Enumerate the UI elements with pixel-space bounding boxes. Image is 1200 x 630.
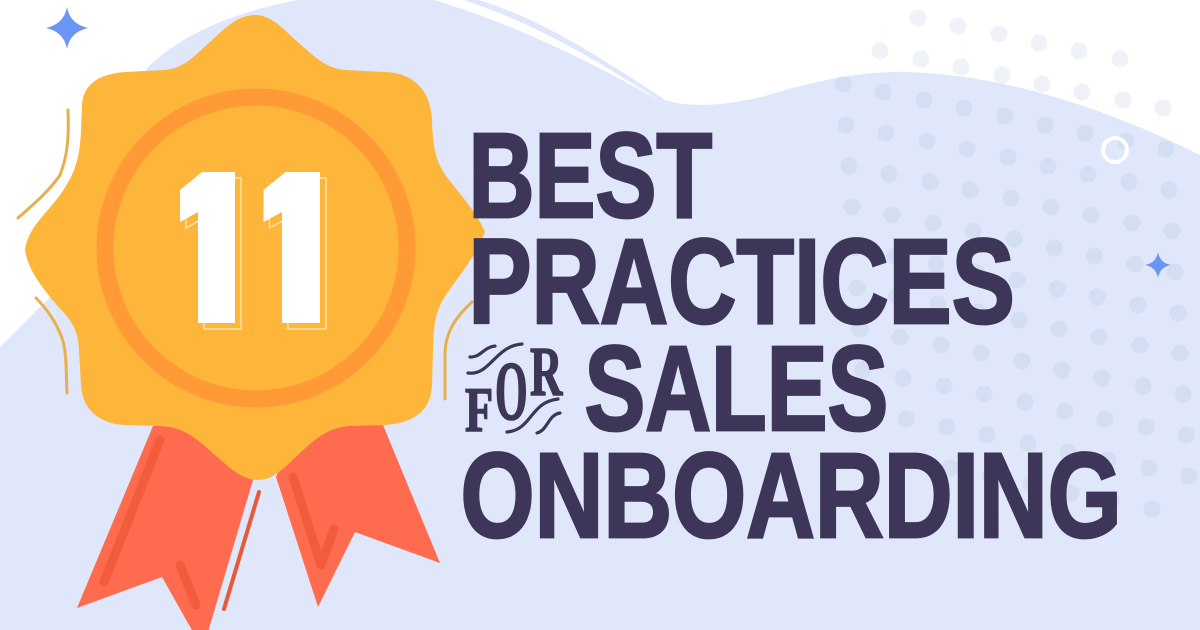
dot pattern xyxy=(834,10,1198,518)
decorative motion lines around badge xyxy=(18,110,472,399)
ornamental word FOR xyxy=(465,333,563,446)
number 11 xyxy=(180,172,327,330)
icon: white ring xyxy=(1103,138,1127,162)
ribbon accent line xyxy=(224,492,259,609)
ornamental word FOR: O xyxy=(495,346,528,438)
badge rosette xyxy=(25,15,485,480)
icon: large blue sparkle xyxy=(46,7,88,49)
right ribbon xyxy=(276,420,440,607)
icon: small blue sparkle xyxy=(1145,252,1171,278)
ornamental word FOR: R xyxy=(530,333,563,410)
badge inner ring xyxy=(105,97,407,399)
number 11: 11 xyxy=(148,128,352,369)
ornamental word FOR: F xyxy=(465,375,493,446)
left ribbon xyxy=(77,420,253,630)
white swoosh line xyxy=(428,0,660,101)
